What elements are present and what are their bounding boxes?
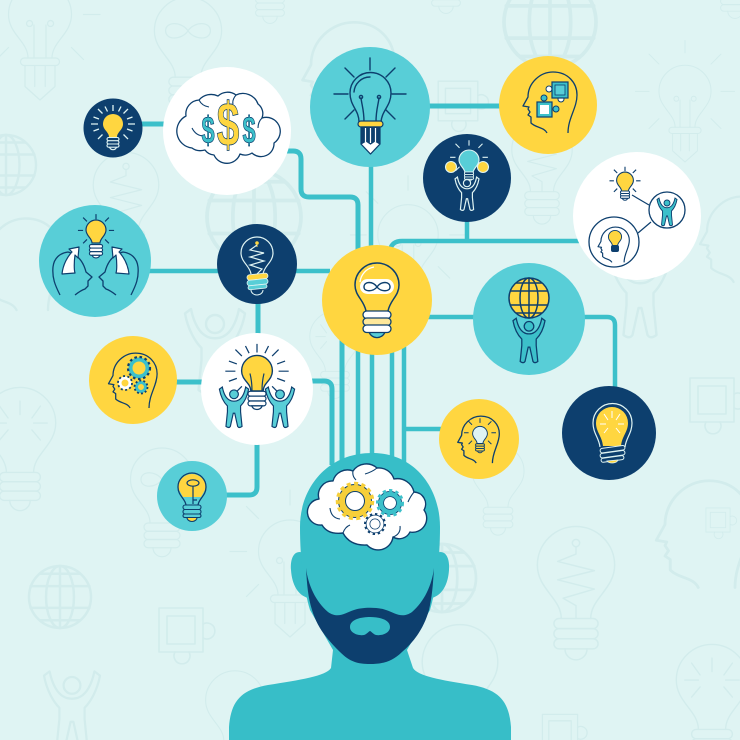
node: spring filament lightbulb [217, 224, 297, 304]
node: person lifting globe [473, 263, 585, 375]
person silhouette [229, 453, 511, 740]
idea bulb [609, 167, 641, 200]
screw base [363, 311, 391, 338]
node: head with gears [89, 336, 177, 424]
node: head with lit bulb [439, 399, 519, 479]
node: network of idea, person and head [573, 152, 701, 280]
node: money brain [163, 67, 291, 195]
node: two people lifting a lightbulb [201, 333, 313, 445]
head and shoulders [229, 453, 511, 740]
head in circle [589, 217, 639, 267]
puzzle pieces [537, 82, 568, 117]
yellow gear [338, 484, 372, 518]
person in circle [649, 192, 685, 228]
pencil [358, 121, 383, 154]
node: key lightbulb [157, 461, 227, 531]
blue gear [378, 490, 402, 516]
node: infinity lightbulb [322, 245, 432, 355]
gears [118, 357, 150, 394]
connector lines [140, 106, 615, 495]
dollar signs: $ [217, 91, 239, 160]
dollar signs: $ [201, 108, 215, 151]
icon: brain with gears [307, 464, 427, 550]
node: head with puzzle pieces [499, 56, 597, 154]
dollar signs: $ [242, 108, 256, 151]
arrows [62, 247, 129, 274]
dollar signs [201, 91, 256, 160]
small gear [365, 514, 385, 534]
beard [306, 568, 434, 664]
node: person holding lightbulbs [423, 134, 511, 222]
node: pencil lightbulb [310, 47, 430, 167]
ears [291, 552, 449, 598]
mouth [350, 617, 390, 635]
node: two heads sharing an idea [39, 205, 151, 317]
node: bright lightbulb on navy [562, 386, 656, 480]
node: navy lightbulb with rays [84, 98, 142, 158]
